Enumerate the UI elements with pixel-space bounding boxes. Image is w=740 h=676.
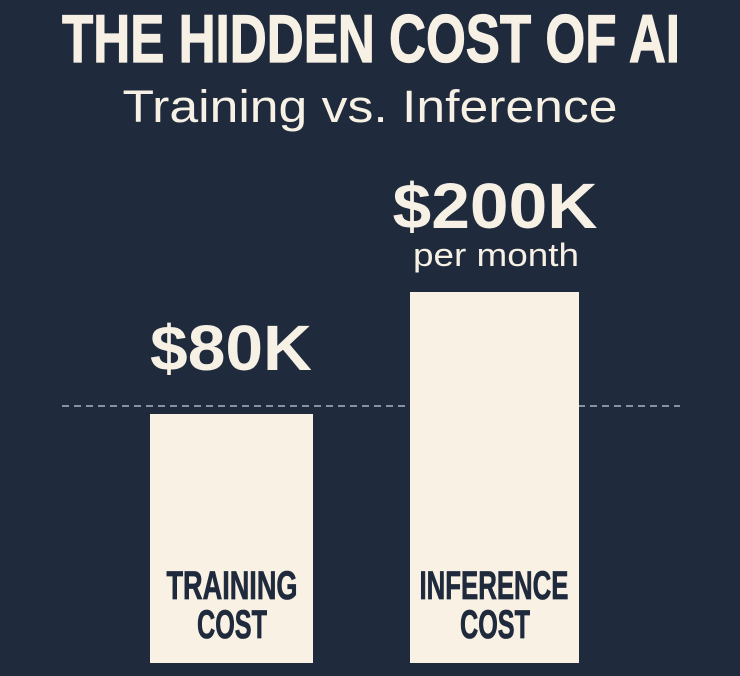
value: $80K: $80K (150, 312, 312, 384)
dashed baseline (62, 405, 680, 407)
label: inference cost: INFERENCE (420, 564, 568, 608)
value: $200K per month: per month (413, 237, 579, 273)
value: $200K per month: $200K (392, 170, 598, 242)
label: training cost: TRAINING (166, 564, 298, 608)
bar: training cost (150, 414, 313, 663)
bar: inference cost (410, 292, 579, 663)
label: training cost: COST (197, 603, 267, 647)
subtitle: Training vs. Inference (122, 81, 618, 132)
value: $200K per month (392, 170, 598, 273)
label: inference cost: COST (460, 603, 530, 647)
label: inference cost (420, 564, 568, 647)
label: training cost (166, 564, 298, 647)
